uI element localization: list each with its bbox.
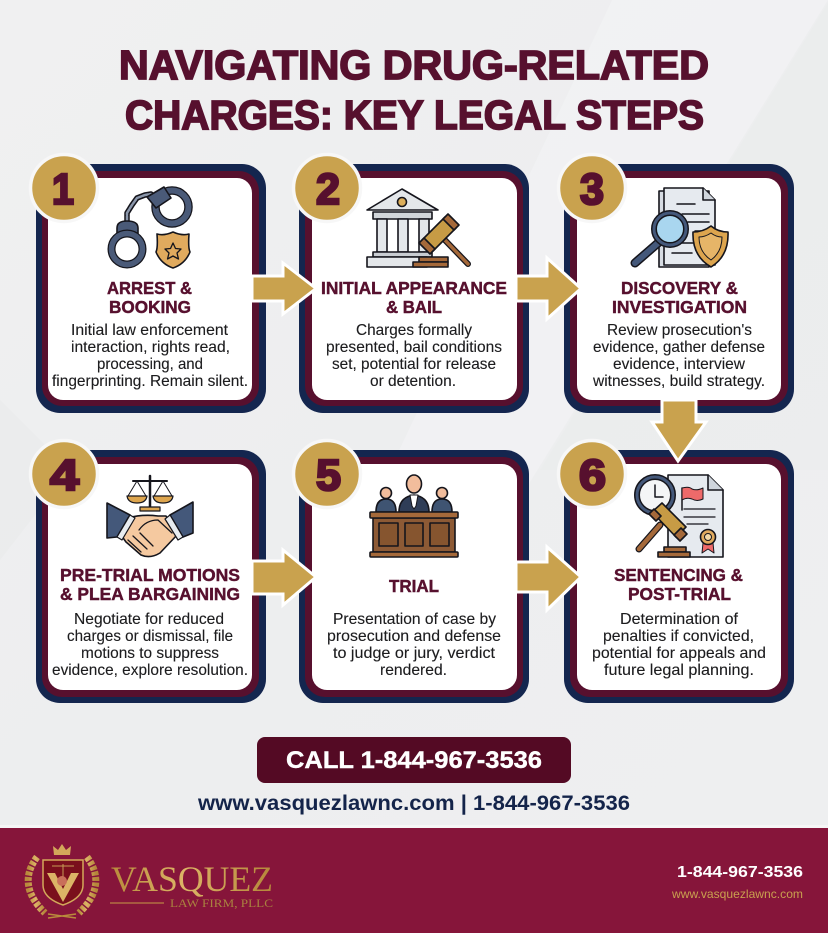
description: penalties if convicted, — [603, 628, 754, 645]
website and phone line: www.vasquezlawnc.com | 1-844-967-3536 — [197, 792, 630, 815]
title: CHARGES: KEY LEGAL STEPS — [125, 92, 704, 138]
badge: number 6 — [558, 440, 626, 508]
call to action button — [257, 737, 571, 783]
icon: documents, magnifier and shield — [635, 188, 728, 267]
heading — [612, 278, 747, 317]
description: prosecution and defense — [327, 628, 501, 645]
panel: step 6 sentencing and post-trial — [564, 450, 794, 703]
badge: number 2 — [294, 154, 360, 222]
description: Review prosecution's — [607, 322, 752, 339]
badge: number 5 — [294, 440, 360, 508]
badge: number 5: 5 — [316, 451, 341, 500]
logo wordmark: VASQUEZ — [111, 859, 273, 899]
description: or detention. — [370, 373, 456, 390]
badge: number 6: 6 — [579, 451, 606, 500]
badge: number 4: 4 — [50, 451, 80, 500]
heading — [614, 565, 743, 604]
badge: number 3: 3 — [580, 165, 604, 214]
badge: number 1 — [30, 154, 98, 222]
logo: Vasquez Law Firm crest — [28, 844, 96, 918]
description — [52, 611, 248, 679]
logo wordmark: LAW FIRM, PLLC — [170, 898, 273, 910]
description: Charges formally — [356, 322, 472, 339]
description — [327, 611, 501, 679]
heading: INITIAL APPEARANCE — [321, 278, 507, 298]
description: Determination of — [620, 611, 739, 628]
arrow: step 1 to 2 — [252, 263, 316, 314]
icon: handcuffs and badge — [112, 187, 190, 268]
description: evidence, gather defense — [593, 339, 765, 356]
heading: & BAIL — [386, 297, 442, 317]
heading: INVESTIGATION — [612, 297, 747, 317]
panel: step 3 discovery and investigation — [564, 164, 794, 413]
heading: ARREST & — [107, 278, 192, 298]
heading — [321, 278, 507, 317]
description: evidence, explore resolution. — [52, 662, 248, 679]
heading — [107, 278, 192, 317]
description: fingerprinting. Remain silent. — [52, 373, 248, 390]
description: interaction, rights read, — [71, 339, 230, 356]
call to action button: CALL 1-844-967-3536 — [286, 747, 542, 774]
badge: number 1: 1 — [52, 165, 74, 214]
badge: number 3 — [558, 154, 626, 222]
arrow: step 4 to 5 — [252, 550, 316, 605]
description — [592, 322, 765, 390]
description: charges or dismissal, file — [67, 628, 233, 645]
description: future legal planning. — [604, 662, 754, 679]
heading: SENTENCING & — [614, 565, 743, 585]
footer phone: 1-844-967-3536 — [677, 864, 803, 881]
heading: TRIAL — [389, 576, 439, 596]
icon: clock, gavel and document — [637, 475, 723, 557]
heading: DISCOVERY & — [621, 278, 738, 298]
description: evidence, interview — [613, 356, 745, 373]
arrow: step 3 to 6 — [652, 400, 706, 461]
heading: PRE-TRIAL MOTIONS — [60, 565, 240, 585]
description: rendered. — [380, 662, 447, 679]
description — [592, 611, 766, 679]
title — [119, 42, 709, 138]
icon: scales and handshake — [107, 476, 193, 557]
description: potential for appeals and — [592, 645, 766, 662]
heading — [60, 565, 240, 604]
description: Negotiate for reduced — [74, 611, 224, 628]
heading: POST-TRIAL — [628, 584, 731, 604]
description: presented, bail conditions — [326, 339, 502, 356]
icon: courthouse and gavel — [367, 189, 468, 267]
panel: step 4 pre-trial motions and plea bargaining — [36, 450, 266, 703]
description — [326, 322, 502, 390]
arrow: step 5 to 6 — [516, 547, 581, 610]
panel: step 2 initial appearance and bail — [299, 164, 529, 413]
description: witnesses, build strategy. — [592, 373, 765, 390]
footer band — [0, 825, 828, 933]
title: NAVIGATING DRUG-RELATED — [119, 42, 709, 88]
heading: BOOKING — [109, 297, 191, 317]
description: set, potential for release — [332, 356, 496, 373]
icon: judge bench — [370, 475, 458, 557]
badge: number 4 — [30, 440, 98, 508]
badge: number 2: 2 — [316, 165, 340, 214]
footer website: www.vasquezlawnc.com — [671, 887, 803, 901]
arrow: step 2 to 3 — [516, 258, 581, 319]
description: Presentation of case by — [333, 611, 496, 628]
panel: step 5 trial — [299, 450, 529, 703]
description: processing, and — [97, 356, 203, 373]
description: Initial law enforcement — [71, 322, 229, 339]
description: motions to suppress — [81, 645, 219, 662]
description — [52, 322, 248, 390]
description: to judge or jury, verdict — [333, 645, 496, 662]
heading: & PLEA BARGAINING — [60, 584, 240, 604]
panel: step 1 arrest and booking — [36, 164, 266, 413]
